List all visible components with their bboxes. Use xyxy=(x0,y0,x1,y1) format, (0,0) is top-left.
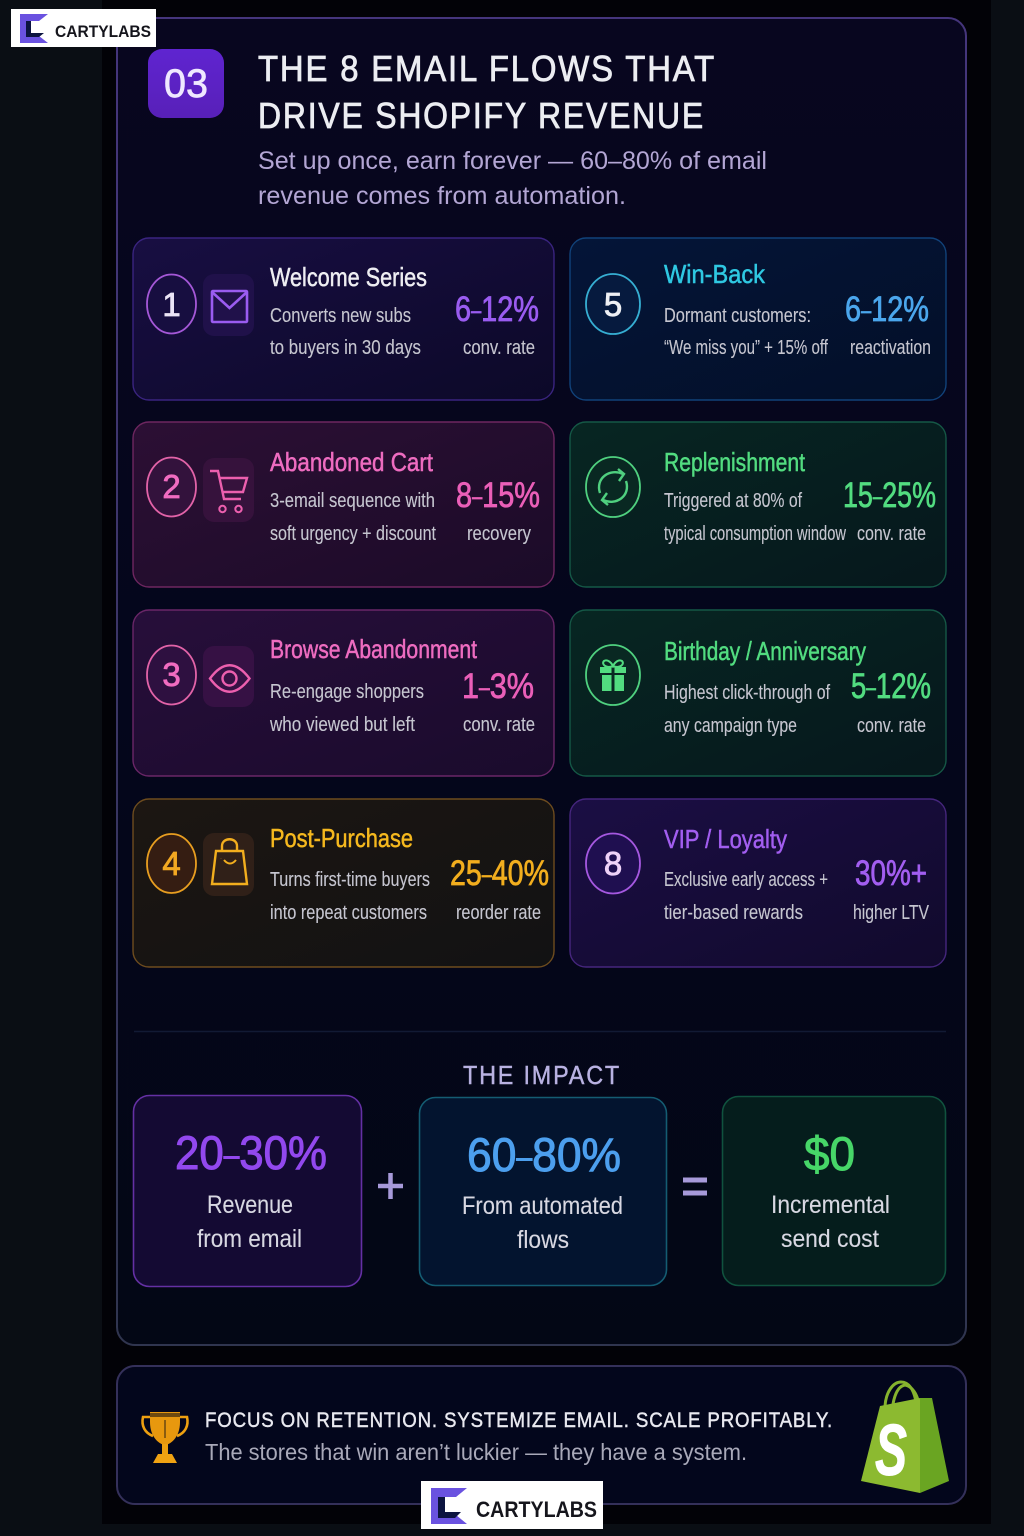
impact box: incremental send cost xyxy=(722,1096,946,1286)
flow text: 3-email sequence with xyxy=(270,490,435,512)
flow text: Replenishment xyxy=(664,447,806,477)
stat: higher LTV xyxy=(853,902,930,924)
flow text xyxy=(664,447,846,545)
number 4: 4 xyxy=(162,845,181,882)
flow text xyxy=(269,634,478,736)
stat: 40% xyxy=(492,854,549,893)
banner text: FOCUS ON RETENTION. SYSTEMIZE EMAIL. SCALE PROFITABLY. xyxy=(205,1408,833,1432)
stat: recovery xyxy=(467,523,531,545)
card 3: Browse Abandonment xyxy=(133,610,554,776)
icon: refresh circle xyxy=(586,457,640,517)
card 4: Post-Purchase xyxy=(133,799,554,967)
flow text: Converts new subs xyxy=(270,305,411,327)
flow text: Post-Purchase xyxy=(270,823,413,853)
impact box: from automated flows xyxy=(420,1098,666,1286)
flow text: tier-based rewards xyxy=(664,902,803,924)
stat: reorder rate xyxy=(456,902,541,924)
stat: 1 xyxy=(462,667,481,706)
card 2: Abandoned Cart xyxy=(133,422,554,587)
flow text: Exclusive early access + xyxy=(664,869,828,891)
flow text: soft urgency + discount xyxy=(270,523,436,545)
stat: – xyxy=(471,298,482,323)
stat: – xyxy=(472,484,483,509)
card 5: Win-Back xyxy=(570,238,946,400)
stat: reactivation xyxy=(850,337,931,359)
stat: – xyxy=(479,675,490,700)
operator: equals xyxy=(683,1180,707,1193)
number 5: 5 xyxy=(604,286,622,323)
impact box: from automated flows: 60 xyxy=(467,1128,519,1181)
flow text xyxy=(664,259,828,359)
flow text: Re-engage shoppers xyxy=(270,681,424,703)
impact box: from automated flows: – xyxy=(516,1141,532,1174)
stat: 8 xyxy=(456,476,475,515)
section number badge: 03 xyxy=(164,62,208,106)
flow text: Abandoned Cart xyxy=(270,447,434,477)
stat xyxy=(462,667,535,736)
number 5 xyxy=(586,274,640,334)
stat: – xyxy=(861,298,872,323)
flow text: into repeat customers xyxy=(270,902,427,924)
flow text: Turns first-time buyers xyxy=(270,869,430,891)
flow text: Triggered at 80% of xyxy=(664,490,802,512)
stat: 12% xyxy=(876,667,931,706)
icon: gift circle xyxy=(586,645,640,705)
panel: main flows panel xyxy=(117,18,966,1345)
impact box: incremental send cost: send cost xyxy=(781,1225,879,1253)
flow text xyxy=(664,824,828,924)
flow text: Birthday / Anniversary xyxy=(664,636,866,666)
logo: bottom CartyLabs xyxy=(421,1481,603,1529)
impact box: revenue from email: – xyxy=(224,1139,240,1172)
stat xyxy=(455,290,539,359)
stat: conv. rate xyxy=(463,714,535,736)
impact box: revenue from email: from email xyxy=(197,1225,302,1253)
icon: eye xyxy=(203,646,254,707)
icon: cart xyxy=(203,458,254,522)
subtitle: revenue comes from automation. xyxy=(258,182,626,210)
stat: conv. rate xyxy=(463,337,535,359)
impact box: from automated flows: From automated xyxy=(462,1192,623,1220)
stat: conv. rate xyxy=(857,715,926,737)
flow text: typical consumption window xyxy=(664,523,846,545)
card 6: Replenishment xyxy=(570,422,946,587)
number 3: 3 xyxy=(162,656,181,693)
impact box: incremental send cost: Incremental xyxy=(771,1191,890,1219)
subtitle: Set up once, earn forever — 60–80% of email xyxy=(258,147,767,175)
subtitle xyxy=(258,147,767,210)
banner text xyxy=(205,1408,833,1465)
stat: 25% xyxy=(882,476,936,515)
stat: – xyxy=(866,675,877,700)
flow text: any campaign type xyxy=(664,715,797,737)
number 2: 2 xyxy=(162,468,181,505)
number 8 xyxy=(586,834,640,894)
stat: 25 xyxy=(450,854,489,893)
impact box: revenue from email: 30% xyxy=(239,1126,327,1179)
flow text: who viewed but left xyxy=(269,714,415,736)
flow text: Highest click-through of xyxy=(664,682,830,704)
icon: trophy xyxy=(142,1412,188,1463)
stat: – xyxy=(482,862,492,887)
impact box: revenue from email xyxy=(134,1096,362,1286)
flow text: to buyers in 30 days xyxy=(270,337,421,359)
banner text: The stores that win aren’t luckier — they have a system. xyxy=(205,1439,747,1465)
stat xyxy=(450,854,549,924)
heading: the impact: THE IMPACT xyxy=(463,1060,621,1090)
stat: conv. rate xyxy=(857,523,926,545)
title xyxy=(258,48,716,136)
title: THE 8 EMAIL FLOWS THAT xyxy=(258,48,716,89)
stat xyxy=(851,667,931,737)
flow text: Browse Abandonment xyxy=(270,634,478,664)
logo: bottom CartyLabs: CARTYLABS xyxy=(476,1497,597,1522)
flow text: Welcome Series xyxy=(270,262,427,292)
stat: – xyxy=(873,484,883,509)
impact box: from automated flows: flows xyxy=(517,1226,569,1254)
icon: Shopify bag: S xyxy=(875,1411,907,1491)
impact box: revenue from email: 20 xyxy=(175,1126,227,1179)
flow text xyxy=(270,823,430,924)
number 3 xyxy=(147,646,196,704)
logo: top CartyLabs: CARTYLABS xyxy=(55,22,151,41)
operator: plus xyxy=(378,1173,403,1199)
stat: 12% xyxy=(481,290,539,329)
logo: top CartyLabs xyxy=(11,9,156,47)
stat xyxy=(853,854,930,924)
flow text xyxy=(664,636,866,737)
title: DRIVE SHOPIFY REVENUE xyxy=(258,95,705,136)
stat: 15% xyxy=(482,476,540,515)
stat: 6 xyxy=(845,290,864,329)
icon: shopping bag xyxy=(203,833,254,896)
impact box: incremental send cost: $0 xyxy=(804,1127,855,1180)
flow text xyxy=(270,447,436,545)
stat: 30%+ xyxy=(855,854,927,893)
flow text: Dormant customers: xyxy=(664,305,811,327)
number 4 xyxy=(147,834,196,893)
stat: 6 xyxy=(455,290,474,329)
stat: 15 xyxy=(843,476,882,515)
stat xyxy=(843,476,936,545)
flow text xyxy=(270,262,427,359)
stat: 3% xyxy=(490,667,534,706)
stat xyxy=(456,476,540,545)
impact box: from automated flows: 80% xyxy=(532,1128,621,1181)
flow text: VIP / Loyalty xyxy=(664,824,787,854)
icon: Shopify bag xyxy=(861,1382,949,1493)
card 8: VIP / Loyalty xyxy=(570,799,946,967)
panel: closing banner xyxy=(117,1366,966,1504)
number 2 xyxy=(147,458,196,516)
flow text: “We miss you” + 15% off xyxy=(664,337,828,359)
impact box: revenue from email: Revenue xyxy=(207,1191,293,1219)
section number badge xyxy=(148,49,224,118)
icon: envelope xyxy=(203,274,254,336)
stat xyxy=(845,290,931,359)
card 7: Birthday / Anniversary xyxy=(570,610,946,776)
card 1: Welcome Series xyxy=(133,238,554,400)
number 1: 1 xyxy=(162,286,181,323)
stat: 5 xyxy=(851,667,870,706)
number 8: 8 xyxy=(604,845,622,882)
flow text: Win-Back xyxy=(664,259,766,289)
number 1 xyxy=(147,274,196,334)
stat: 12% xyxy=(871,290,929,329)
